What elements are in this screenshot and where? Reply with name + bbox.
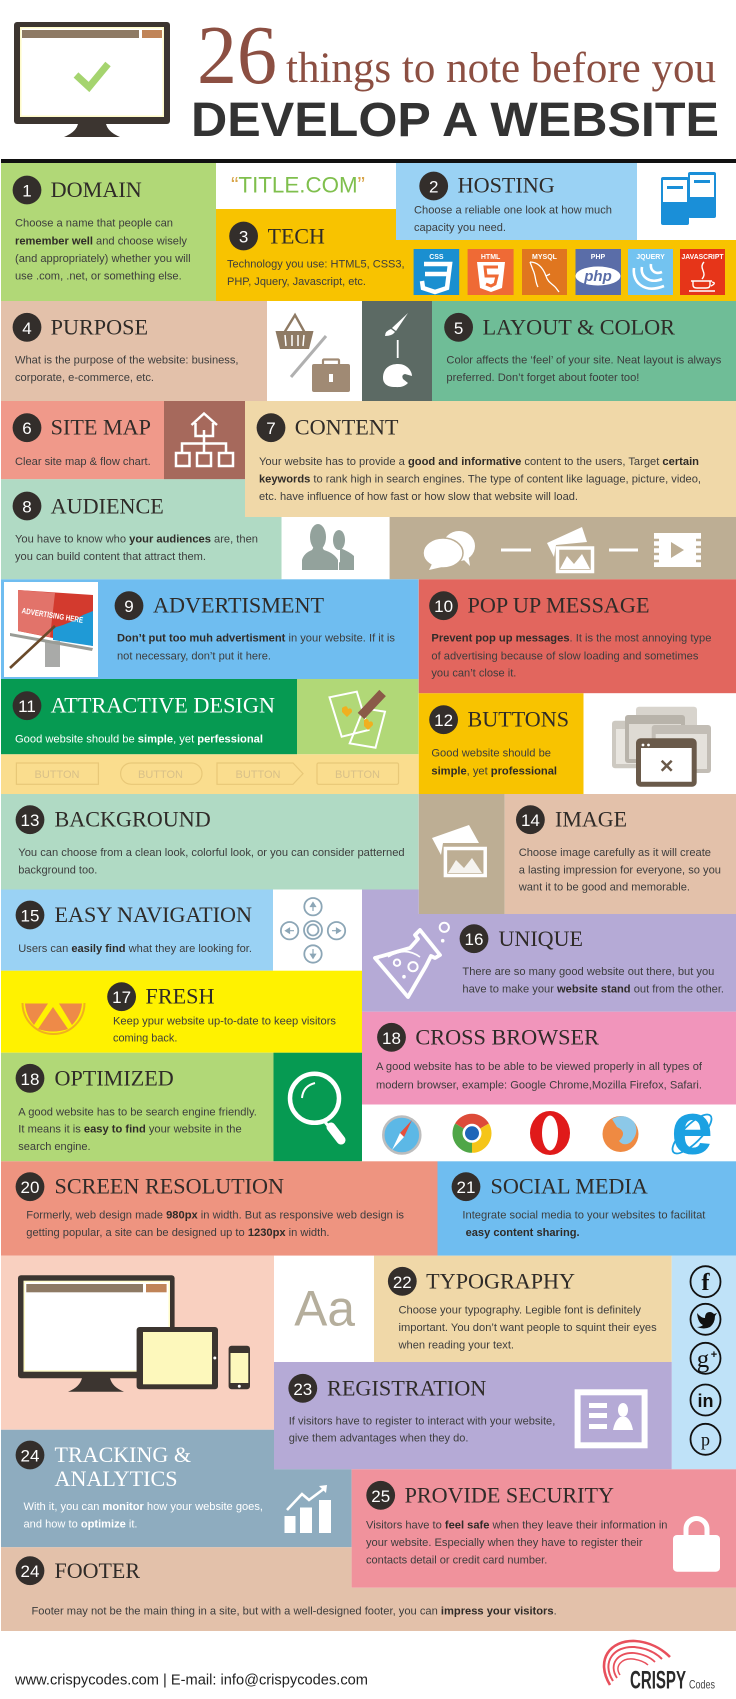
text: background: You can choose from a clean look, colorful look, or you can consider patterned bbox=[18, 847, 405, 859]
number badge 20 bbox=[16, 1172, 44, 1201]
text: optimized bbox=[18, 1106, 257, 1153]
icon: profile card bbox=[578, 1392, 645, 1445]
icon: pinterest bbox=[690, 1424, 720, 1455]
text: layout and color bbox=[446, 354, 722, 384]
icon: mysql: MYSQL bbox=[532, 254, 558, 261]
number badge 13: 13 bbox=[21, 811, 39, 830]
heading: audience: AUDIENCE bbox=[51, 493, 164, 518]
button sample 4 bbox=[317, 763, 398, 784]
number badge 5 bbox=[444, 313, 473, 342]
icon: opera bbox=[530, 1111, 570, 1155]
icons: media strip bbox=[390, 517, 736, 579]
icon: padlock bbox=[673, 1518, 720, 1572]
text: screen resolution: getting popular, a site can be designed up to 1230px in width. bbox=[26, 1227, 330, 1239]
button sample 3: BUTTON bbox=[235, 769, 281, 781]
text: purpose bbox=[15, 354, 238, 384]
text: hosting: Choose a reliable one look at how much bbox=[414, 204, 612, 216]
panel: advertisment bbox=[1, 579, 418, 679]
text: social media bbox=[462, 1209, 706, 1239]
text: site map: Clear site map & flow chart. bbox=[15, 456, 151, 468]
text: cross browser bbox=[376, 1061, 703, 1092]
icon: sitemap bbox=[164, 401, 245, 479]
number badge 16 bbox=[460, 924, 488, 953]
panel: cross browser bbox=[362, 1012, 736, 1104]
icon: brush and palette bbox=[362, 301, 432, 401]
panel: browser icons bbox=[362, 1087, 736, 1170]
number badge 17: 17 bbox=[112, 988, 131, 1007]
number badge 2: 2 bbox=[429, 178, 438, 196]
text: purpose: What is the purpose of the website: business, bbox=[15, 354, 238, 366]
panel: hosting bbox=[396, 163, 637, 240]
panel: content bbox=[245, 401, 736, 517]
text: cross browser: modern browser, example: Google Chrome,Mozilla Firefox, Safari. bbox=[376, 1080, 702, 1092]
icon: billboard: ADVERTISING HERE bbox=[21, 606, 84, 625]
text: content: etc. have influence of how fast or how slow that website will load. bbox=[259, 491, 578, 503]
heading: domain: DOMAIN bbox=[51, 177, 142, 202]
text: registration: If visitors have to register to interact with your website, bbox=[289, 1415, 555, 1427]
panel: button samples bbox=[1, 754, 418, 794]
number badge 6 bbox=[13, 413, 41, 442]
icon: facebook bbox=[690, 1266, 720, 1297]
number badge 8 bbox=[13, 492, 41, 520]
number badge 21: 21 bbox=[457, 1178, 475, 1197]
text: buttons: simple, yet professional bbox=[431, 765, 557, 777]
number badge 4: 4 bbox=[22, 319, 32, 338]
text: audience bbox=[15, 534, 258, 563]
number badge 20: 20 bbox=[21, 1178, 39, 1197]
text: content: keywords to rank high in search engines. The type of content like laguage, picture, video, bbox=[259, 474, 701, 486]
text: pop up message: you can’t close it. bbox=[431, 668, 516, 680]
heading: background: BACKGROUND bbox=[54, 807, 211, 832]
heading: registration: REGISTRATION bbox=[327, 1375, 486, 1400]
heading: layout and color: LAYOUT & COLOR bbox=[483, 314, 675, 339]
heading: content: CONTENT bbox=[295, 415, 399, 440]
text: pop up message bbox=[431, 633, 711, 680]
icon: people bbox=[282, 517, 390, 579]
panel: background bbox=[1, 794, 418, 890]
text: typography bbox=[398, 1304, 657, 1351]
icon: safari bbox=[383, 1116, 420, 1154]
text: pop up message: Prevent pop up messages. It is the most annoying type bbox=[431, 633, 711, 645]
heading: cross browser: CROSS BROWSER bbox=[415, 1025, 599, 1050]
heading: pop up message: POP UP MESSAGE bbox=[468, 593, 650, 618]
icon: css: CSS bbox=[429, 254, 444, 261]
number badge 16: 16 bbox=[465, 930, 483, 949]
text: advertisment bbox=[117, 633, 395, 662]
text: optimized: It means it is easy to find your website in the bbox=[18, 1124, 242, 1136]
number badge 2 bbox=[419, 172, 448, 200]
text: domain: use .com, .net, or something else. bbox=[15, 270, 182, 282]
number badge 24: 24 bbox=[21, 1562, 39, 1581]
heading: footer: FOOTER bbox=[54, 1558, 140, 1583]
text: unique: have to make your website stand out from the other. bbox=[462, 983, 724, 995]
panel: audience bbox=[1, 479, 282, 579]
number badge 1 bbox=[13, 176, 41, 204]
icon: flask bbox=[375, 923, 449, 997]
text: audience: You have to know who your audiences are, then bbox=[15, 534, 258, 546]
number badge 18: 18 bbox=[21, 1070, 39, 1089]
text: registration: give them advantages when they do. bbox=[289, 1433, 468, 1445]
number badge 9 bbox=[115, 591, 143, 620]
text: pop up message: of advertising because of slow loading and sometimes bbox=[431, 650, 699, 662]
icon: html bbox=[468, 249, 514, 295]
text: image bbox=[518, 847, 721, 894]
heading: provide security: PROVIDE SECURITY bbox=[405, 1482, 614, 1507]
button sample 2: BUTTON bbox=[138, 769, 183, 781]
panel: image bbox=[505, 794, 736, 914]
text: provide security: Visitors have to feel safe when they leave their information in bbox=[366, 1520, 668, 1532]
panel: unique bbox=[362, 890, 736, 1012]
icon: php: php bbox=[583, 268, 612, 285]
text: hosting: capacity you need. bbox=[414, 222, 506, 234]
panel: devices bbox=[1, 1256, 274, 1430]
text: layout and color: preferred. Don’t forget about footer too! bbox=[446, 372, 639, 384]
heading: image: IMAGE bbox=[555, 807, 627, 832]
text: content: Your website has to provide a good and informative content to the users, Target certain bbox=[259, 456, 699, 468]
logo: crispy codes bbox=[604, 1641, 715, 1694]
heading: purpose: PURPOSE bbox=[51, 314, 148, 339]
icon: stacked windows bbox=[584, 693, 736, 794]
icon: php: PHP bbox=[591, 254, 606, 261]
text: audience: you can build content that attract them. bbox=[15, 551, 206, 563]
panel: social icons bbox=[672, 1256, 736, 1469]
text: hosting bbox=[414, 204, 612, 234]
text: provide security: contacts detail or credit card number. bbox=[366, 1554, 547, 1566]
text: tracking and analytics: and how to optimize it. bbox=[24, 1518, 138, 1530]
text: typography: important. You don’t want people to squint their eyes bbox=[398, 1322, 657, 1334]
number badge 18 bbox=[377, 1023, 406, 1052]
text: attractive design: Good website should be simple, yet perfessional bbox=[15, 733, 263, 745]
text: purpose: corporate, e-commerce, etc. bbox=[15, 372, 154, 384]
panel: footer bbox=[1, 1547, 736, 1631]
icon: javascript: JAVASCRIPT bbox=[682, 254, 724, 261]
icon: basket and briefcase bbox=[267, 301, 362, 401]
number badge 18 bbox=[16, 1064, 44, 1093]
number badge 15 bbox=[16, 901, 44, 929]
text: optimized: A good website has to be search engine friendly. bbox=[18, 1106, 257, 1118]
number badge 17 bbox=[107, 982, 136, 1011]
heading: unique: UNIQUE bbox=[498, 926, 583, 951]
text: buttons: Good website should be bbox=[431, 748, 551, 760]
number badge 8: 8 bbox=[22, 498, 32, 516]
title bbox=[191, 9, 719, 147]
text: typography: when reading your text. bbox=[398, 1339, 514, 1351]
panel: title.com: “TITLE.COM” bbox=[231, 172, 365, 198]
number badge 10: 10 bbox=[434, 597, 453, 616]
number badge 22: 22 bbox=[393, 1273, 412, 1292]
icon: google plus: + bbox=[711, 1349, 717, 1361]
text: background: background too. bbox=[18, 864, 97, 876]
button sample 4: BUTTON bbox=[335, 769, 380, 781]
icon: php bbox=[576, 249, 621, 295]
text: content bbox=[259, 456, 701, 503]
icon: chrome bbox=[452, 1114, 492, 1153]
icon: twitter bbox=[690, 1304, 720, 1335]
heading: tech: TECH bbox=[268, 223, 325, 248]
number badge 24: 24 bbox=[21, 1446, 39, 1466]
icon: billboard bbox=[4, 582, 98, 677]
button sample 1 bbox=[16, 763, 98, 784]
number badge 6: 6 bbox=[22, 419, 32, 438]
number badge 22 bbox=[388, 1267, 417, 1296]
heading: tracking and analytics bbox=[54, 1442, 191, 1491]
text: fresh: coming back. bbox=[113, 1033, 177, 1045]
text: provide security: your website. Especially when they have to register their bbox=[366, 1537, 643, 1549]
icon: design cards and pencil bbox=[297, 679, 418, 754]
icon: google plus bbox=[690, 1343, 720, 1374]
panel: typography bbox=[374, 1256, 672, 1362]
icon: growth chart bbox=[284, 1485, 331, 1533]
title: things to note before you bbox=[286, 45, 716, 92]
text: unique: There are so many good website out there, but you bbox=[462, 966, 714, 978]
icon: desktop monitor bbox=[18, 1275, 175, 1392]
icon: jquery: JQUERY bbox=[636, 254, 665, 261]
panel: easy navigation bbox=[1, 890, 273, 971]
panel: fresh bbox=[1, 971, 362, 1053]
number badge 3 bbox=[229, 222, 258, 250]
panel: layout and color bbox=[432, 301, 736, 401]
icon: navigation pad bbox=[273, 890, 362, 971]
text: social media: Integrate social media to your websites to facilitat bbox=[462, 1209, 706, 1221]
contact line: www.crispycodes.com | E-mail: info@crispycodes.com bbox=[14, 1672, 368, 1688]
panel: provide security bbox=[352, 1469, 736, 1588]
text: image: Choose image carefully as it will create bbox=[519, 847, 711, 859]
text: unique bbox=[462, 966, 724, 995]
number badge 5: 5 bbox=[454, 319, 463, 338]
text: optimized: search engine. bbox=[18, 1141, 91, 1153]
heading: site map: SITE MAP bbox=[51, 415, 151, 440]
panel: registration bbox=[274, 1362, 672, 1469]
icon: mysql bbox=[522, 249, 567, 295]
number badge 9: 9 bbox=[124, 597, 134, 616]
panel: optimized bbox=[1, 1053, 274, 1161]
heading: typography: TYPOGRAPHY bbox=[426, 1268, 575, 1293]
number badge 23: 23 bbox=[293, 1380, 312, 1399]
text: footer: Footer may not be the main thing in a site, but with a well-designed footer, you can impress your visitors. bbox=[32, 1605, 557, 1617]
number badge 24 bbox=[16, 1556, 44, 1585]
text: tech bbox=[227, 259, 405, 288]
text: easy navigation: Users can easily find what they are looking for. bbox=[18, 943, 252, 955]
panel: site map bbox=[1, 401, 164, 479]
icon: typography sample bbox=[274, 1256, 374, 1362]
panel: buttons bbox=[419, 693, 584, 794]
number badge 25 bbox=[366, 1481, 395, 1510]
icon: orange slice bbox=[22, 1003, 84, 1034]
heading: optimized: OPTIMIZED bbox=[54, 1065, 174, 1090]
heading: attractive design: ATTRACTIVE DESIGN bbox=[51, 693, 275, 718]
text: tracking and analytics: With it, you can monitor how your website goes, bbox=[24, 1501, 263, 1513]
icon: linkedin: in bbox=[698, 1391, 714, 1411]
number badge 11 bbox=[13, 691, 41, 720]
number badge 1: 1 bbox=[22, 182, 32, 200]
number badge 12 bbox=[429, 705, 458, 734]
icon: firefox bbox=[602, 1116, 638, 1152]
button sample 1: BUTTON bbox=[34, 769, 80, 781]
panel: attractive design bbox=[1, 679, 297, 754]
text: screen resolution: Formerly, web design made 980px in width. But as responsive web design is bbox=[26, 1209, 404, 1221]
icon: html: HTML bbox=[481, 254, 501, 261]
text: provide security bbox=[366, 1520, 668, 1566]
text: domain bbox=[15, 218, 191, 282]
text: domain: remember well and choose wisely bbox=[15, 235, 187, 247]
panel: social media bbox=[438, 1161, 736, 1256]
heading: buttons: BUTTONS bbox=[468, 707, 569, 732]
heading: hosting: HOSTING bbox=[458, 173, 555, 198]
text: fresh bbox=[113, 1015, 336, 1045]
icon: typography sample: Aa bbox=[294, 1281, 355, 1337]
icon: facebook: f bbox=[702, 1270, 710, 1296]
number badge 15: 15 bbox=[21, 906, 39, 926]
number badge 14: 14 bbox=[521, 811, 540, 830]
number badge 12: 12 bbox=[434, 711, 453, 730]
text: domain: (and appropriately) whether you will bbox=[15, 253, 191, 265]
number badge 18: 18 bbox=[382, 1029, 401, 1048]
number badge 10 bbox=[429, 591, 458, 620]
title: 26 bbox=[197, 9, 277, 102]
icon: monitor with check bbox=[14, 22, 170, 137]
text: fresh: Keep ypur website up-to-date to keep visitors bbox=[113, 1015, 336, 1027]
number badge 13 bbox=[16, 805, 44, 834]
text: background bbox=[18, 847, 405, 876]
panel: pop up message bbox=[419, 579, 736, 693]
panel: screen resolution bbox=[1, 1161, 438, 1256]
icon: internet explorer: e bbox=[671, 1087, 713, 1170]
text: buttons bbox=[431, 748, 557, 777]
heading: advertisment: ADVERTISMENT bbox=[153, 593, 325, 618]
text: advertisment: not necessary, don’t put it here. bbox=[117, 650, 271, 662]
text: tech: PHP, Jquery, Javascript, etc. bbox=[227, 276, 366, 288]
text: social media: easy content sharing. bbox=[466, 1227, 580, 1239]
icon: pinterest: p bbox=[701, 1430, 710, 1450]
number badge 7: 7 bbox=[266, 419, 276, 438]
text: tech: Technology you use: HTML5, CSS3, bbox=[227, 259, 405, 271]
text: image: want it to be good and memorable. bbox=[518, 882, 690, 894]
number badge 23 bbox=[288, 1374, 317, 1403]
icon: phone bbox=[229, 1346, 250, 1389]
text: screen resolution bbox=[26, 1209, 404, 1239]
text: layout and color: Color affects the ‘feel’ of your site. Neat layout is always bbox=[446, 354, 722, 366]
number badge 11: 11 bbox=[18, 697, 36, 716]
heading: social media: SOCIAL MEDIA bbox=[490, 1174, 648, 1199]
heading: screen resolution: SCREEN RESOLUTION bbox=[54, 1174, 284, 1199]
text: image: a lasting impression for everyone, so you bbox=[519, 864, 721, 876]
logo: crispy codes: Codes bbox=[689, 1677, 715, 1691]
icon: tablet bbox=[137, 1327, 218, 1389]
text: tracking and analytics bbox=[24, 1501, 263, 1530]
number badge 14 bbox=[516, 805, 545, 834]
button sample 3 bbox=[217, 763, 303, 784]
panel: tracking and analytics bbox=[1, 1430, 352, 1547]
icon: image bbox=[419, 794, 505, 914]
number badge 3: 3 bbox=[239, 228, 248, 246]
icon: google plus: g bbox=[697, 1346, 710, 1373]
number badge 7 bbox=[257, 413, 285, 442]
title: DEVELOP A WEBSITE bbox=[191, 94, 719, 147]
icon: linkedin bbox=[690, 1384, 720, 1416]
text: registration bbox=[289, 1415, 555, 1445]
heading: fresh: FRESH bbox=[146, 984, 215, 1009]
heading: tracking and analytics: ANALYTICS bbox=[54, 1466, 178, 1491]
number badge 24 bbox=[16, 1441, 44, 1469]
logo: crispy codes: CRISPY bbox=[630, 1666, 686, 1694]
text: domain: Choose a name that people can bbox=[15, 218, 173, 230]
number badge 4 bbox=[13, 313, 41, 342]
number badge 21 bbox=[452, 1172, 480, 1201]
icon: magnifier bbox=[274, 1053, 362, 1161]
header bbox=[14, 9, 719, 147]
icon: javascript bbox=[680, 249, 725, 295]
number badge 25: 25 bbox=[371, 1487, 390, 1506]
icon: hosting servers bbox=[661, 172, 716, 225]
heading: tracking and analytics: TRACKING & bbox=[54, 1442, 191, 1467]
panel: domain bbox=[1, 163, 216, 301]
text: cross browser: A good website has to be able to be viewed properly in all types of bbox=[376, 1061, 703, 1073]
icon: jquery bbox=[628, 249, 673, 295]
panel: title.com bbox=[216, 163, 396, 209]
icon: css bbox=[414, 249, 459, 295]
text: typography: Choose your typography. Legible font is definitely bbox=[398, 1304, 641, 1316]
button sample 2 bbox=[121, 763, 202, 784]
panel: tech bbox=[216, 209, 736, 301]
panel: purpose bbox=[1, 301, 267, 401]
heading: easy navigation: EASY NAVIGATION bbox=[54, 902, 252, 927]
text: advertisment: Don’t put too muh advertisment in your website. If it is bbox=[117, 633, 395, 645]
